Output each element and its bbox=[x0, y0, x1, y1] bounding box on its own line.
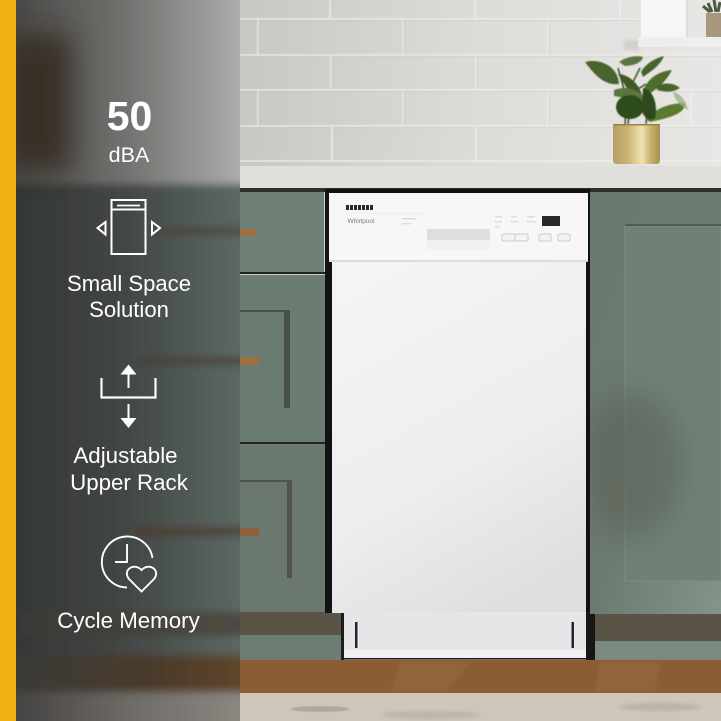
cabinets: dark toe kick and shadow bbox=[240, 188, 721, 662]
background: tiled wall bbox=[240, 0, 721, 170]
plant bbox=[585, 56, 688, 164]
indicator lights bbox=[346, 205, 373, 210]
buttons bbox=[502, 234, 570, 241]
stat: 50 dBA: dBA bbox=[109, 143, 150, 167]
icon: dishwasher with side arrows bbox=[98, 200, 160, 254]
label: Small Space bbox=[67, 271, 191, 296]
gold pot bbox=[613, 124, 660, 164]
rug bbox=[240, 693, 721, 721]
digital display bbox=[542, 216, 560, 226]
yellow side bar bbox=[0, 0, 16, 721]
stat: 50 dBA: 50 bbox=[107, 93, 152, 139]
window frame, shelf and small pot bbox=[624, 0, 721, 50]
feature: cycle memory bbox=[57, 537, 201, 633]
feature: adjustable upper rack: Upper Rack bbox=[70, 470, 189, 495]
icon: rack with up and down arrows bbox=[102, 364, 156, 428]
icon: clock with heart bbox=[102, 537, 156, 592]
left cabinet drawers bbox=[240, 192, 329, 612]
label: Cycle Memory bbox=[57, 608, 201, 633]
feature: small space solution bbox=[67, 200, 191, 322]
kick plate bbox=[344, 612, 586, 660]
right cabinet door bbox=[582, 192, 721, 614]
feature: small space solution: Solution bbox=[89, 297, 169, 322]
brand logo: Whirlpool bbox=[347, 218, 375, 225]
countertop bbox=[240, 166, 721, 189]
stat: 50 dBA bbox=[107, 93, 152, 167]
handle recess bbox=[427, 229, 490, 250]
feature: adjustable upper rack bbox=[70, 364, 189, 495]
dishwasher door bbox=[332, 262, 586, 613]
floor bbox=[240, 660, 721, 721]
dishwasher bbox=[329, 193, 588, 660]
dark gap around dishwasher bbox=[325, 189, 590, 613]
label: Adjustable bbox=[73, 443, 178, 468]
left translucent blurred panel bbox=[16, 0, 240, 721]
control panel bbox=[329, 193, 588, 262]
